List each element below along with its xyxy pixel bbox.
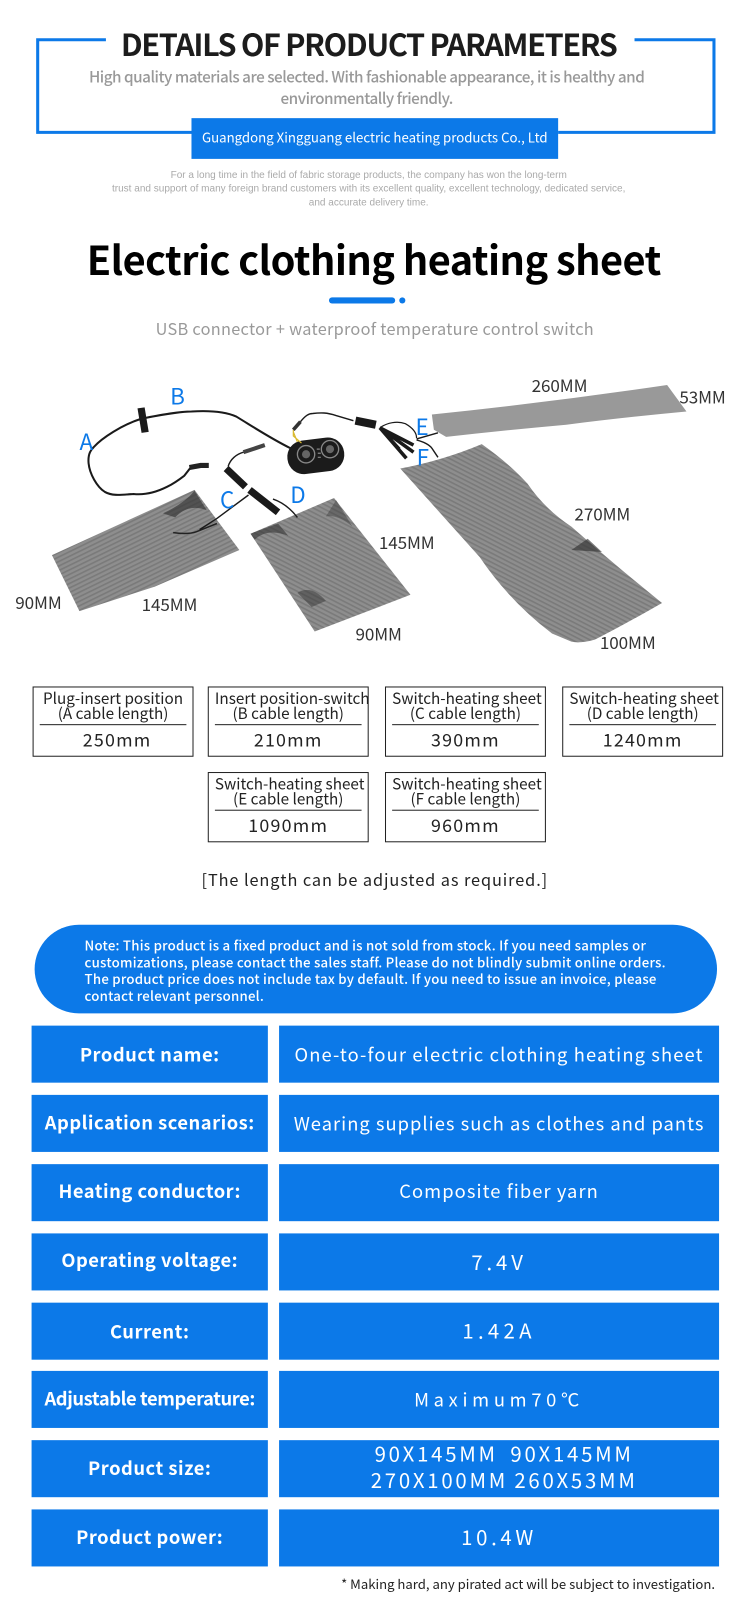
row value: operating voltage <box>279 1233 719 1290</box>
text: 145MM <box>379 530 435 554</box>
text: 53MM <box>679 384 726 408</box>
header frame <box>36 38 716 134</box>
cable: power lead <box>88 411 290 495</box>
row value: product power: 10.4W <box>461 1521 537 1551</box>
spec box: F cable <box>385 772 546 842</box>
cables: to E and F sheets <box>293 413 438 458</box>
row label: adjustable temperature: Adjustable temperature: <box>44 1385 255 1412</box>
row label: product size <box>32 1440 268 1497</box>
spec box: E cable <box>208 772 369 842</box>
footer note: * Making hard, any pirated act will be subject to investigation. <box>341 1574 715 1593</box>
spec box: D cable: (D cable length) <box>587 703 699 724</box>
spec box: B cable <box>208 686 369 757</box>
spec box: D cable <box>562 686 723 757</box>
spec box: C cable: 390mm <box>431 727 500 753</box>
spec box: D cable: 1240mm <box>603 727 683 753</box>
spec box: B cable: Insert position-switch <box>215 687 370 709</box>
row label: product name: Product name: <box>80 1041 220 1067</box>
row value: adjustable temperature <box>279 1371 719 1428</box>
text: 90MM <box>15 590 62 614</box>
text: C <box>220 483 234 515</box>
diagram dimension labels <box>15 373 726 654</box>
row label: current <box>32 1303 268 1360</box>
text: company description <box>112 170 625 208</box>
row value: current: 1.42A <box>462 1314 536 1344</box>
heating sheet: bottom left <box>52 490 239 611</box>
spec box: A cable: (A cable length) <box>58 703 168 724</box>
row value: product power <box>279 1509 719 1566</box>
row value: adjustable temperature: Maximum70℃ <box>414 1386 584 1413</box>
note pill: customizations, please contact the sales staff. Please do not blindly submit online orders. <box>85 952 666 971</box>
spec box: B cable: 210mm <box>254 727 323 753</box>
spec box: D cable: Switch-heating sheet <box>569 687 719 709</box>
text: 270MM <box>574 501 630 526</box>
text: F <box>417 440 429 473</box>
text: company description: and accurate delivery time. <box>309 197 429 208</box>
row label: product name <box>32 1026 268 1083</box>
row label: operating voltage: Operating voltage: <box>61 1247 238 1273</box>
note: adjustable length: [The length can be adjusted as required.] <box>202 867 548 891</box>
text: D <box>290 478 306 510</box>
row label: heating conductor <box>32 1164 268 1221</box>
row value: heating conductor <box>279 1164 719 1221</box>
spec box: E cable: 1090mm <box>248 813 328 838</box>
subtitle: USB connector + waterproof temperature control switch <box>156 316 594 340</box>
row label: heating conductor: Heating conductor: <box>59 1177 241 1204</box>
spec box: A cable: Plug-insert position <box>43 687 183 709</box>
spec box: C cable: Switch-heating sheet <box>392 687 542 709</box>
row value: heating conductor: Composite fiber yarn <box>399 1177 599 1204</box>
note pill <box>35 925 717 1013</box>
note pill: Note: This product is a fixed product and is not sold from stock. If you need samples or <box>85 935 646 954</box>
spec box: F cable: Switch-heating sheet <box>392 773 542 794</box>
row value: product name: One-to-four electric clothing heating sheet <box>294 1041 704 1067</box>
spec box: E cable: (E cable length) <box>233 788 343 810</box>
text: 260MM <box>532 373 587 397</box>
row value: application scenarios: Wearing supplies such as clothes and pants <box>294 1110 704 1137</box>
row label: application scenarios: Application scenarios: <box>45 1109 255 1136</box>
spec box: E cable: Switch-heating sheet <box>215 773 364 794</box>
title: electric clothing heating sheet: Electric clothing heating sheet <box>87 230 661 287</box>
row value: product size <box>279 1440 719 1497</box>
row label: operating voltage <box>32 1233 268 1290</box>
cables: to C and D sheets <box>200 445 297 530</box>
heating sheet: large <box>400 444 662 642</box>
text: quality intro: High quality materials are selected. With fashionable appearance, it is healthy and <box>89 66 644 88</box>
inline clip <box>137 407 149 433</box>
note pill: The product price does not include tax by default. If you need to issue an invoice, please <box>85 969 657 988</box>
spec box: C cable <box>385 686 546 757</box>
row label: product power <box>32 1509 268 1566</box>
text: company description: For a long time in the field of fabric storage products, the company has won the long-term <box>171 170 567 181</box>
heating sheet: narrow strip <box>432 385 686 437</box>
spec box: A cable: 250mm <box>83 727 152 753</box>
row label: adjustable temperature <box>32 1371 268 1428</box>
text: A <box>79 425 93 457</box>
spec box: B cable: (B cable length) <box>233 703 344 724</box>
text: quality intro: environmentally friendly. <box>281 88 453 109</box>
title accent: bar and dot <box>329 297 406 304</box>
text: quality intro <box>89 66 644 109</box>
spec box: A cable <box>33 686 194 757</box>
row value: current <box>279 1303 719 1360</box>
banner: company name: Guangdong Xingguang electric heating products Co., Ltd <box>202 127 548 147</box>
row label: product power: Product power: <box>76 1524 223 1550</box>
text: 90MM <box>355 621 402 646</box>
row value: product name <box>279 1026 719 1083</box>
row label: application scenarios <box>32 1095 268 1152</box>
note pill: contact relevant personnel. <box>85 986 264 1005</box>
row label: product size: Product size: <box>88 1454 211 1481</box>
text: company description: trust and support of many foreign brand customers with its excellent quality, excellent technology, dedicated service, <box>112 184 625 195</box>
power plug <box>189 465 209 467</box>
spec box: F cable: 960mm <box>431 813 500 838</box>
heading: details of product parameters: DETAILS OF PRODUCT PARAMETERS <box>121 20 617 65</box>
spec box: F cable: (F cable length) <box>411 788 520 810</box>
diagram letter labels <box>79 379 429 515</box>
text: E <box>416 409 429 442</box>
spec box: C cable: (C cable length) <box>410 703 521 724</box>
row label: current: Current: <box>110 1318 189 1344</box>
product diagram <box>52 385 686 642</box>
row value: application scenarios <box>279 1095 719 1152</box>
text: B <box>170 379 185 411</box>
row value: operating voltage: 7.4V <box>471 1246 527 1276</box>
text: 145MM <box>142 592 197 616</box>
control switch <box>285 436 346 476</box>
text: 100MM <box>600 629 656 654</box>
row value: product size: 90X145MM 90X145MM 270X100MM 260X53MM <box>371 1438 638 1494</box>
heating sheet: middle <box>251 498 410 631</box>
banner: company name <box>191 118 558 159</box>
